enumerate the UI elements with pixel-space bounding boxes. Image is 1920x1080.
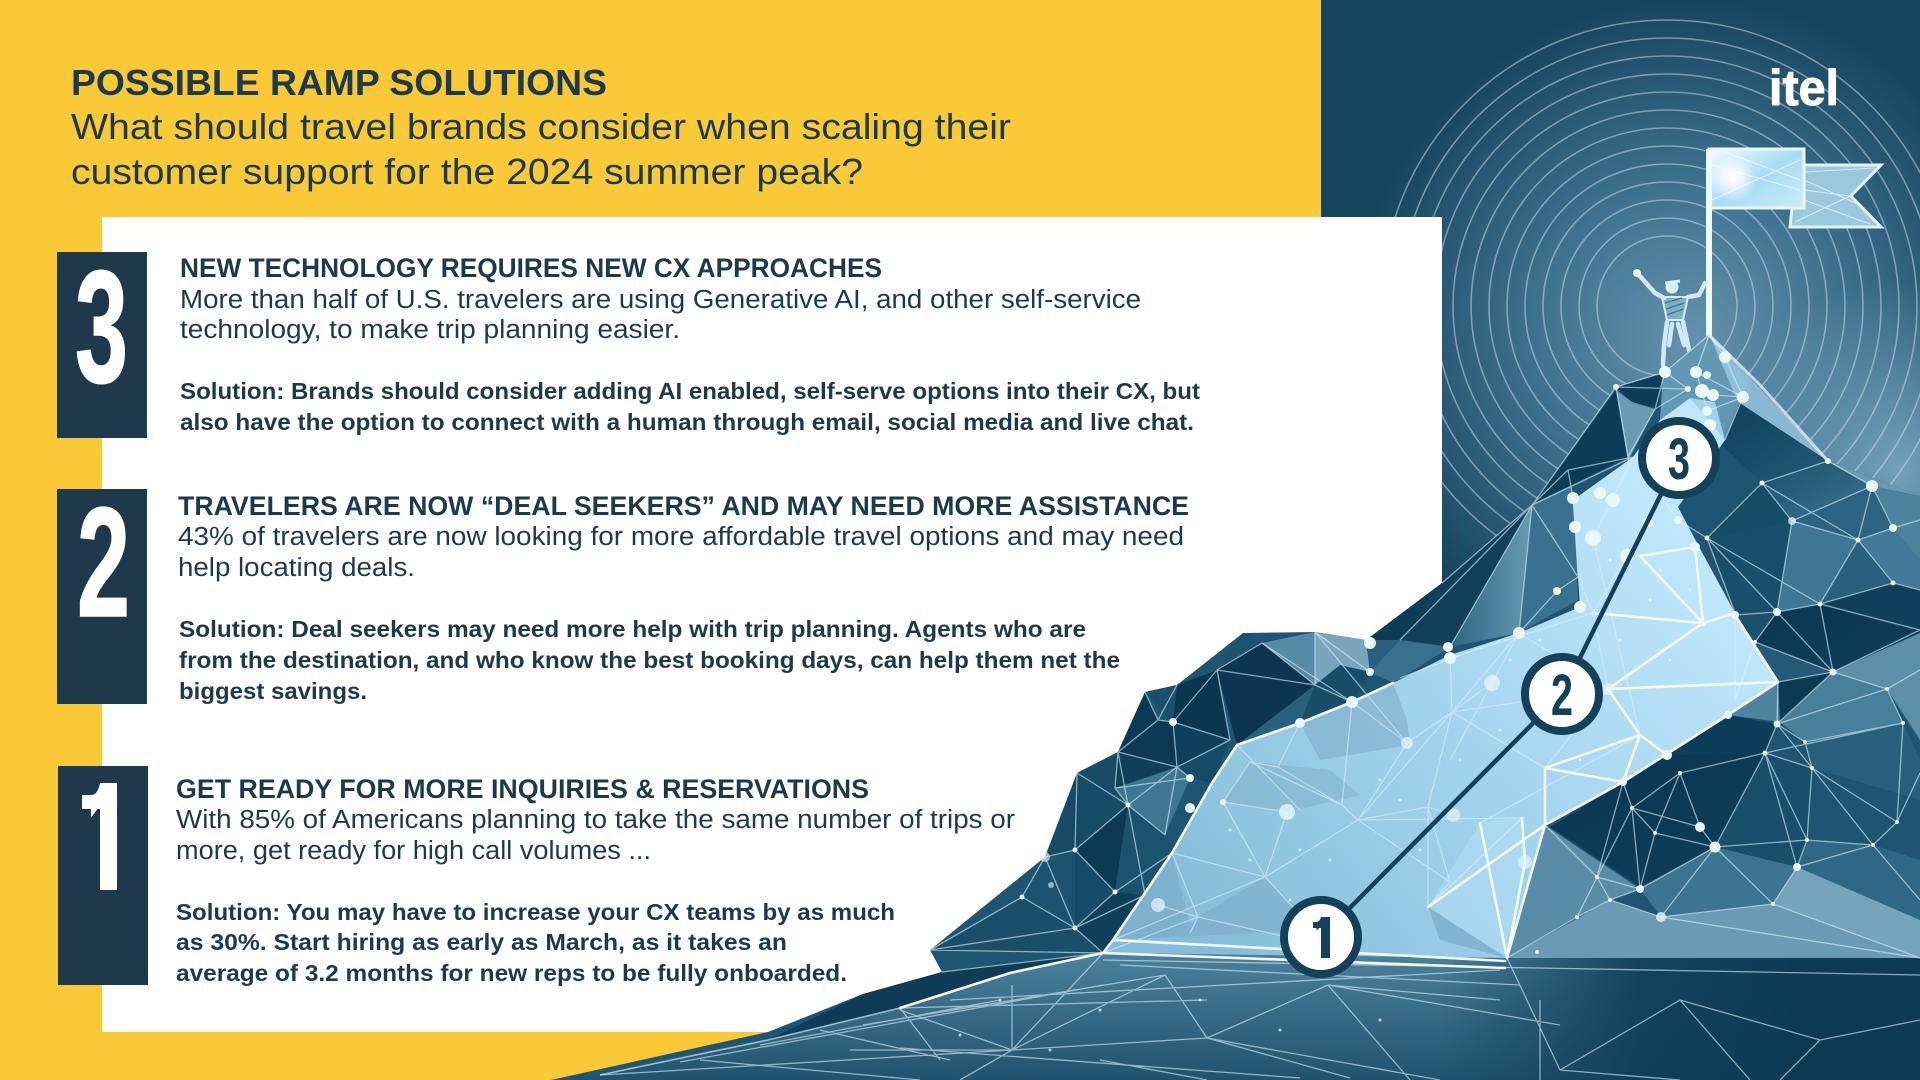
facets: ground xyxy=(551,953,1920,1080)
connector line between steps xyxy=(1321,458,1679,937)
subtitle line 2: customer support for the 2024 summer peak? xyxy=(71,151,863,192)
step marker 2: 2 xyxy=(1551,663,1573,728)
section 1 heading: GET READY FOR MORE INQUIRIES & RESERVATIONS xyxy=(176,774,869,804)
shaded facets inside path xyxy=(1237,683,1410,760)
section 1 text: average of 3.2 months for new reps to be fully onboarded. xyxy=(176,960,847,986)
flag pole xyxy=(1706,149,1712,337)
logo: itel: itel xyxy=(1769,60,1839,116)
climber figure xyxy=(1633,269,1705,365)
flag body xyxy=(1709,149,1804,208)
section 1 body: With 85% of Americans planning to take the same number of trips or xyxy=(176,806,1016,834)
section 3 solution: Solution: Brands should consider adding AI enabled, self-serve options into their CX, but xyxy=(180,378,1200,404)
scattered dust on path xyxy=(958,558,1692,1052)
summit ridge glow xyxy=(1709,335,1828,461)
section 3 text xyxy=(180,253,1200,435)
section 2 text xyxy=(178,491,1189,704)
section 3 text: technology, to make trip planning easier. xyxy=(180,316,680,344)
step marker 2 xyxy=(1525,657,1599,731)
section 1 solution: Solution: You may have to increase your CX teams by as much xyxy=(176,899,895,925)
climber fist xyxy=(1633,269,1641,277)
climber hair xyxy=(1665,281,1680,283)
subtitle line 1: What should travel brands consider when scaling their xyxy=(71,106,1011,147)
panel: dark blue backdrop xyxy=(1321,0,1920,1080)
section 1 text: more, get ready for high call volumes ... xyxy=(176,837,651,865)
section 3 text: also have the option to connect with a human through email, social media and live chat. xyxy=(180,409,1194,435)
wireframe lines xyxy=(600,335,1920,1080)
climber head xyxy=(1666,280,1678,294)
step marker 3 xyxy=(1642,421,1716,495)
section 2 text: help locating deals. xyxy=(178,554,415,582)
section 2 text: from the destination, and who know the best booking days, can help them net the xyxy=(179,647,1120,673)
faint ridge to the lower left xyxy=(600,1008,900,1075)
glowing path xyxy=(1103,334,1778,958)
facets: central right xyxy=(1507,715,1920,958)
concentric rings xyxy=(1381,20,1920,592)
section 2 heading: TRAVELERS ARE NOW “DEAL SEEKERS” AND MAY NEED MORE ASSISTANCE xyxy=(178,491,1189,521)
mountain silhouette xyxy=(551,334,1920,1080)
mountain artwork xyxy=(551,334,1920,1080)
section 3 heading: NEW TECHNOLOGY REQUIRES NEW CX APPROACHES xyxy=(180,253,882,283)
climber outline fill xyxy=(1662,297,1688,320)
section 1 text: as 30%. Start hiring as early as March, as it takes an xyxy=(176,929,787,955)
flag tail xyxy=(1790,165,1881,227)
panel: white content card xyxy=(102,217,1442,1032)
number box 3 xyxy=(57,237,147,438)
step marker 1 xyxy=(1284,900,1358,974)
number box 2 xyxy=(57,476,147,704)
climber limbs xyxy=(1637,273,1705,365)
section 2 text: biggest savings. xyxy=(179,678,367,704)
number box 2: 2 xyxy=(77,476,130,650)
section 2 body: 43% of travelers are now looking for more affordable travel options and may need xyxy=(178,523,1184,551)
number box 1 xyxy=(58,751,148,985)
step marker 3: 3 xyxy=(1668,427,1690,492)
step marker 1: 1 xyxy=(1314,906,1334,971)
title: POSSIBLE RAMP SOLUTIONS xyxy=(71,62,607,103)
facets: left shoulder xyxy=(930,375,1661,953)
climber shirt stripes xyxy=(1665,298,1684,315)
translucent summit facet xyxy=(1660,334,1748,440)
bright ridge lines xyxy=(900,547,1778,1008)
flag on pole xyxy=(1706,149,1881,337)
title block xyxy=(71,62,1011,192)
section 2 solution: Solution: Deal seekers may need more help with trip planning. Agents who are xyxy=(179,616,1086,642)
number box 1: 1 xyxy=(86,751,126,923)
number box 3: 3 xyxy=(75,237,128,416)
section 1 text xyxy=(176,774,1016,986)
facets: upper right xyxy=(1707,334,1920,800)
network nodes xyxy=(1020,351,1905,954)
section 3 body: More than half of U.S. travelers are using Generative AI, and other self-service xyxy=(180,286,1141,314)
